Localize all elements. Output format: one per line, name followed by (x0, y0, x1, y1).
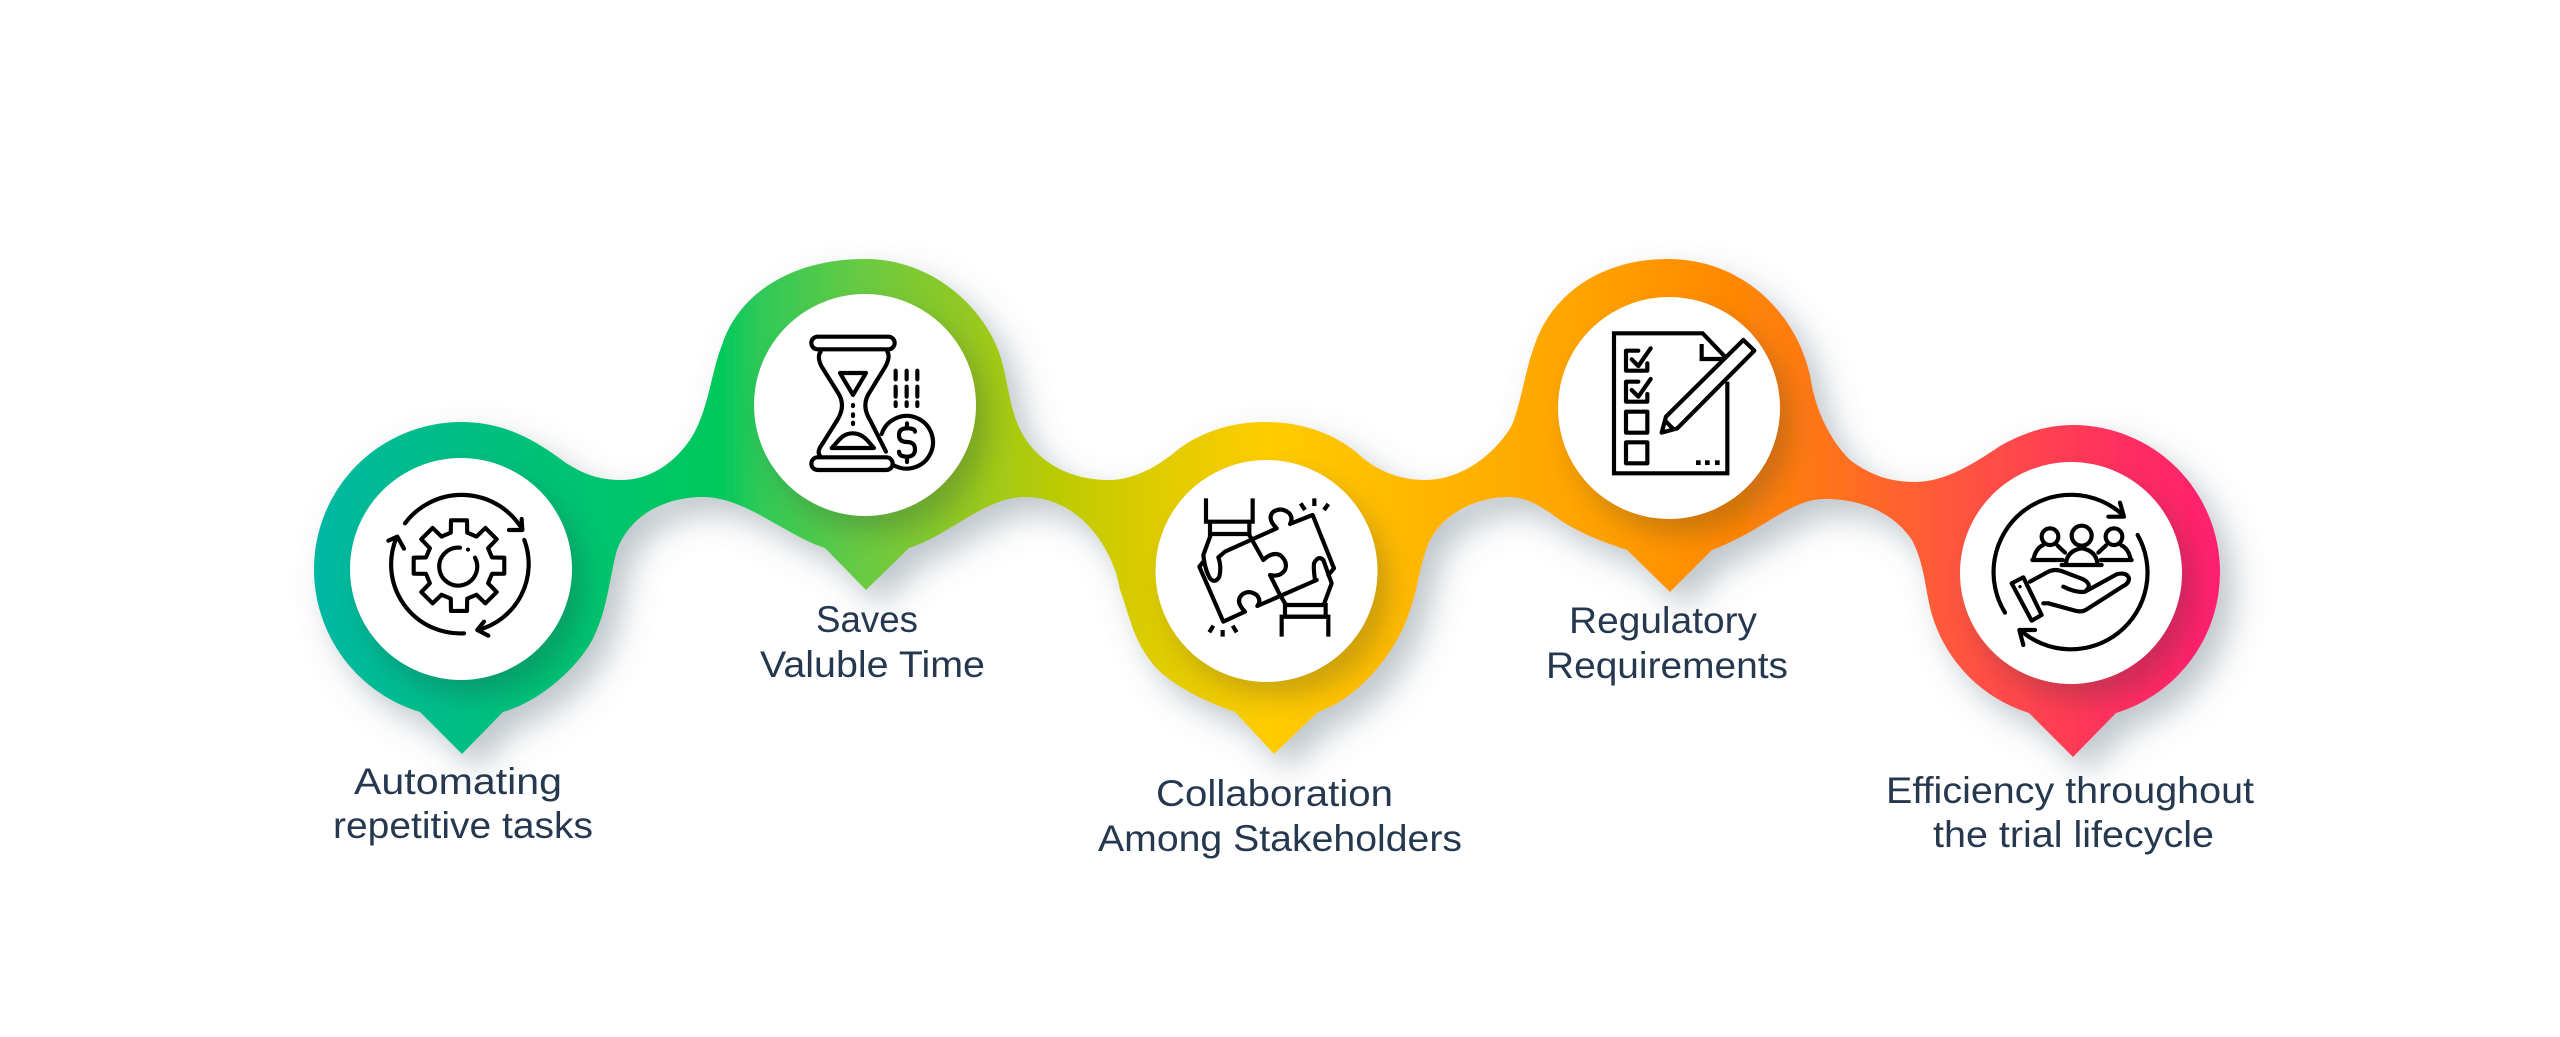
label 2: Saves (816, 599, 918, 640)
icon: hands joining puzzle pieces (1199, 498, 1334, 637)
label 4: Regulatory (1569, 600, 1758, 641)
white disc 5 (1960, 462, 2182, 684)
white disc 1 (350, 458, 572, 680)
step 1: automating (333, 458, 593, 846)
label 5 (1886, 770, 2255, 855)
label 3: Among Stakeholders (1098, 818, 1462, 859)
label 3: Collaboration (1156, 773, 1393, 814)
label 3 (1098, 773, 1462, 859)
step 3: collaboration (1098, 460, 1462, 859)
label 4 (1546, 600, 1788, 686)
white disc 4 (1558, 297, 1780, 519)
icon: hourglass and dollar coin (811, 337, 933, 470)
label 1: repetitive tasks (333, 805, 593, 846)
label 5: the trial lifecycle (1933, 814, 2214, 855)
label 5: Efficiency throughout (1886, 770, 2255, 811)
label 1 (333, 761, 593, 846)
label 4: Requirements (1546, 645, 1788, 686)
icon: checklist with pencil (1614, 333, 1754, 473)
step 4: regulatory (1546, 297, 1788, 686)
infographic: five step timeline (311, 258, 2254, 858)
label 1: Automating (354, 761, 562, 802)
gradient ribbon with pins (314, 259, 2220, 757)
label 2: Valuble Time (760, 644, 985, 685)
icon: gear with cycle arrows (388, 495, 529, 636)
white disc 3 (1156, 460, 1378, 682)
label 2 (760, 599, 985, 685)
step 2: saves time (754, 294, 985, 685)
step 5: efficiency (1886, 462, 2255, 855)
white disc 2 (754, 294, 976, 516)
inner shadows under white discs (362, 310, 2194, 700)
icon: hand holding people with cycle arrows (1994, 495, 2148, 649)
